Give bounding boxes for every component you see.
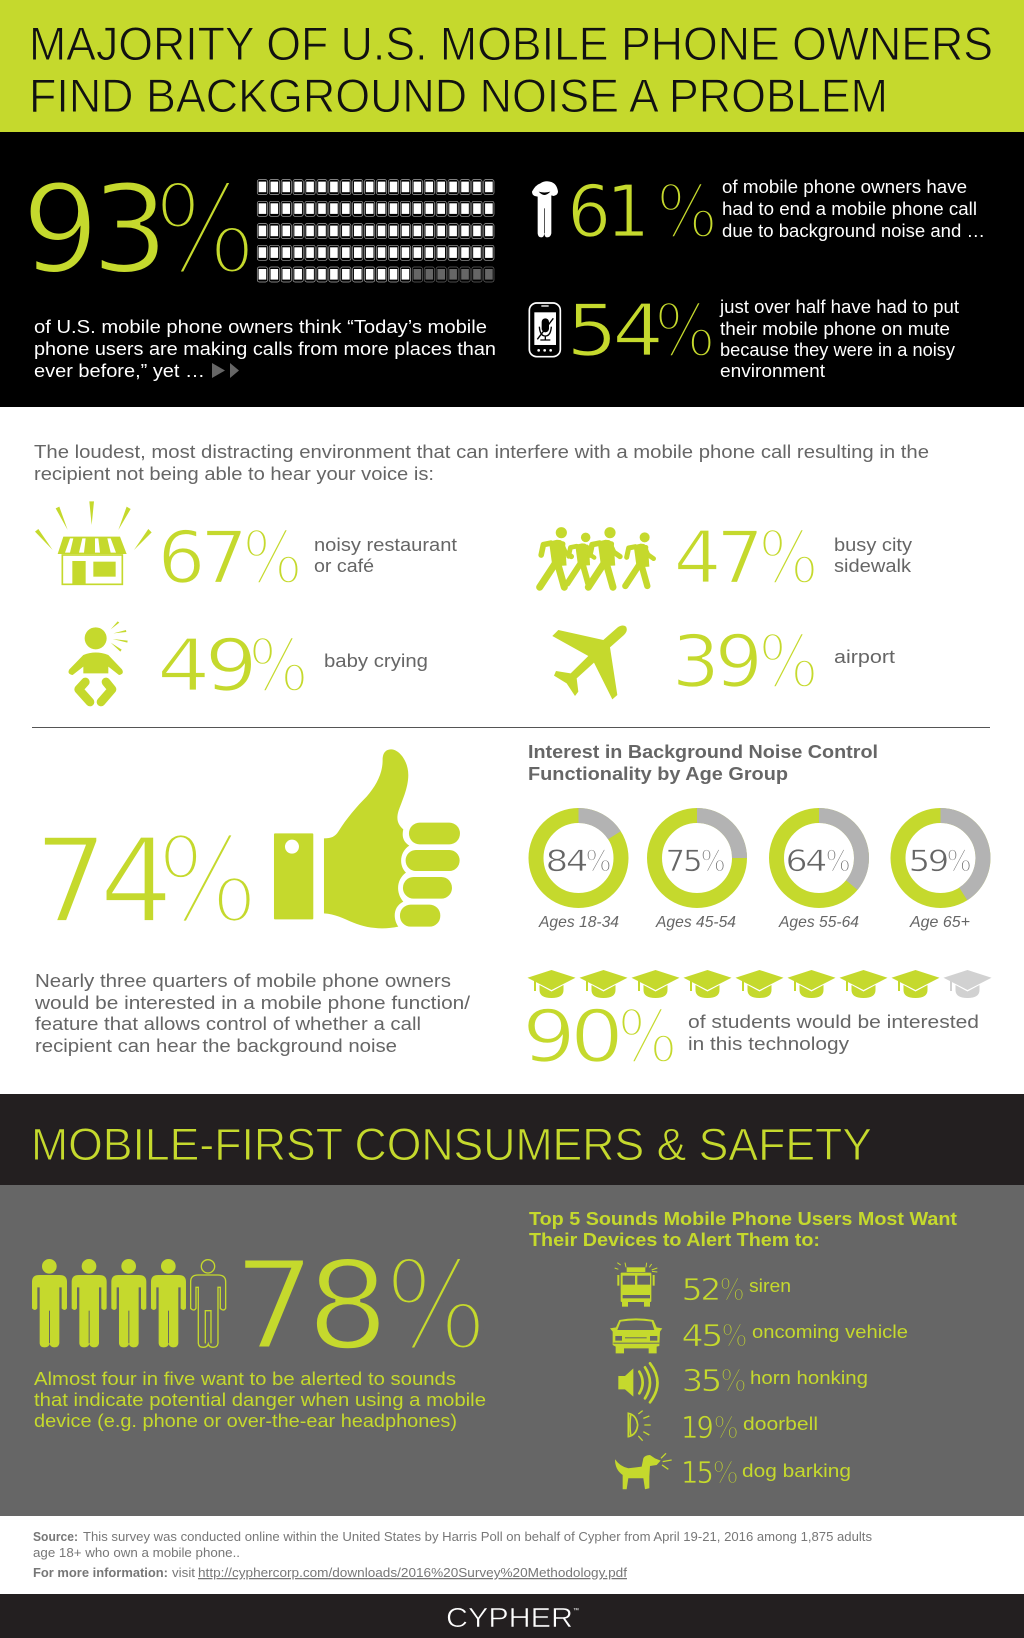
label: horn honking [750,1367,868,1388]
donut chart: ages 45-54: % [701,844,726,878]
donut chart: age 65+: Age 65+ [909,914,970,931]
text: 54 percent description [719,296,959,381]
footer: source notes: This survey was conducted online within the United States by Harris Poll on behalf of Cypher from April 19-21, 2016 among 1,875 adults [83,1530,872,1544]
stat: 67 percent noisy restaurant: 67 [158,516,243,600]
label: siren [749,1275,791,1296]
stat: 39 percent airport: 39 [672,620,758,704]
logo: Cypher: ™ [573,1607,579,1614]
donut chart: age 65+: % [947,844,972,878]
stat: 90 percent of students [522,994,979,1080]
stat: 78 percent: 78 [233,1235,381,1377]
panel: interest by age group [528,741,983,931]
text: 74 percent description [34,970,471,1056]
stat: 52 percent siren [682,1273,791,1308]
icon: barking dog [615,1453,672,1489]
text: 74 percent description: recipient can hear the background noise [35,1035,397,1056]
stat: 74 percent: % [157,812,258,951]
label [314,534,457,576]
text: 61 percent description: of mobile phone owners have [722,176,967,197]
donut chart: ages 55-64: Ages 55-64 [778,914,859,931]
stat: 78 percent: % [385,1234,487,1378]
icon row: people 4 of 5 [32,1259,226,1347]
text: 74 percent description: feature that allows control of whether a call [35,1013,421,1034]
text: 78 percent description: that indicate potential danger when using a mobile [34,1389,486,1410]
stat: 52 percent siren: 52 [682,1273,719,1308]
footer: source notes: age 18+ who own a mobile phone.. [33,1546,240,1560]
stat: 93 percent: % [154,158,256,302]
intro text: recipient not being able to hear your voice is: [34,463,434,484]
stat: 67 percent noisy restaurant: % [242,516,302,601]
icon: baby crying [69,621,128,702]
stat: 93 percent: 93 [21,159,160,301]
stat: 45 percent oncoming vehicle [682,1319,908,1354]
panel: 74 percent thumbs up [34,749,471,1056]
heading: Interest in Background Noise Control [528,741,878,762]
icon: doorbell [628,1411,651,1441]
text: 54 percent description: because they were in a noisy [720,339,956,360]
icon grid: 100 phones, 93 highlighted [257,180,494,282]
footer band with logo [0,1594,1024,1638]
intro text: The loudest, most distracting environment that can interfere with a mobile phone call resulting in the [34,441,929,462]
stat: 15 percent dog barking: % [713,1456,739,1491]
stat: 19 percent doorbell: 19 [681,1411,712,1446]
label: doorbell [743,1413,818,1434]
label: oncoming vehicle [752,1321,908,1342]
stat: 35 percent horn honking: 35 [682,1364,720,1399]
title: MAJORITY OF U.S. MOBILE PHONE OWNERS [29,17,993,70]
footer: source notes: For more information: [33,1566,168,1580]
heading: top 5 sounds [529,1208,957,1250]
text: 93 percent description: of U.S. mobile phone owners think “Today’s mobile [34,316,487,337]
stat: 49 percent baby crying [157,624,428,709]
stat: 15 percent dog barking [681,1456,851,1491]
text: 74 percent description: Nearly three quarters of mobile phone owners [35,970,451,991]
text: 74 percent description: would be interested in a mobile phone function/ [34,992,471,1013]
stat: 49 percent baby crying: % [248,624,308,709]
stat: 61 percent [567,170,718,255]
donut chart: age 65+ [898,816,983,931]
text: 61 percent description: due to background noise and … [722,220,985,241]
icon: airplane [552,625,627,699]
stat: 47 percent busy sidewalk: 47 [674,516,759,600]
stat: 39 percent airport [672,620,895,705]
icon: walking people [540,527,654,587]
stat: 54 percent: 54 [566,288,660,372]
stat: 61 percent: 61 [567,170,645,254]
footer: source notes [33,1530,872,1580]
donut chart: ages 18-34: % [586,844,612,878]
text: 93 percent description: phone users are making calls from more places than [34,338,496,359]
stat: 19 percent doorbell [681,1411,818,1446]
stat: 90 percent of students: % [618,995,678,1080]
donut chart: ages 45-54 [654,816,740,931]
label: airport [834,646,895,667]
text: 54 percent description: environment [720,360,825,381]
icon: noisy storefront [35,501,152,585]
donut chart: ages 18-34: 84 [546,844,588,878]
panel: loudest environments [0,407,1024,730]
stat: 47 percent busy sidewalk: % [758,516,818,601]
title [29,17,993,122]
donut chart: age 65+: 59 [909,844,947,878]
text: students description: in this technology [688,1033,850,1054]
label: sidewalk [834,555,912,576]
text: 54 percent description: just over half have had to put [719,296,959,317]
stat: 90 percent of students: 90 [522,994,619,1078]
text: 93 percent description [34,316,496,381]
stat: 54 percent [566,288,716,374]
label: busy city [834,534,913,555]
donut chart: ages 45-54: 75 [666,844,701,878]
icon: thumbs up [274,749,460,928]
heading: top 5 sounds: Top 5 Sounds Mobile Phone Users Most Want [529,1208,957,1229]
donut chart: ages 18-34 [536,816,621,931]
panel: black statistics [0,132,1024,407]
footer: source notes: http://cyphercorp.com/downloads/2016%20Survey%20Methodology.pdf [198,1566,628,1580]
label: noisy restaurant [314,534,457,555]
icon: speaker [618,1363,657,1402]
arrows [212,363,239,378]
icon row: graduation caps [528,970,992,998]
text: 61 percent description [722,176,985,241]
stat: 49 percent baby crying: 49 [157,624,252,708]
heading: top 5 sounds: Their Devices to Alert Them to: [529,1229,820,1250]
label [834,534,913,576]
footer: source notes: visit [172,1566,196,1580]
label: or café [314,555,374,576]
title: FIND BACKGROUND NOISE A PROBLEM [29,69,888,122]
icon: car [610,1318,662,1353]
donut chart: ages 55-64: 64 [786,844,827,878]
text: 54 percent description: their mobile phone on mute [720,318,950,339]
stat: 15 percent dog barking: 15 [681,1456,712,1491]
panel: safety [0,1185,1024,1516]
stat: 78 percent [233,1234,487,1378]
stat: 39 percent airport: % [758,620,818,705]
section heading band [0,1094,1024,1185]
stat: 74 percent [34,812,258,951]
text: 78 percent description: device (e.g. phone or over-the-ear headphones) [34,1410,457,1431]
heading [528,741,878,784]
icon: person covering ear [532,181,558,237]
stat: 93 percent [21,158,256,302]
stat: 61 percent: % [656,170,718,255]
label: baby crying [324,650,428,671]
icon: phone on mute [529,303,560,357]
stat: 45 percent oncoming vehicle: 45 [682,1319,721,1354]
header banner [0,0,1024,132]
icon: fire truck [615,1263,657,1307]
stat: 52 percent siren: % [720,1273,745,1308]
footer: source notes: Source: [33,1530,78,1544]
text: 78 percent description: Almost four in five want to be alerted to sounds [34,1368,456,1389]
stat: 35 percent horn honking: % [720,1364,746,1399]
donut chart: ages 45-54: Ages 45-54 [655,914,736,931]
text: 61 percent description: had to end a mobile phone call [722,198,977,219]
stat: 45 percent oncoming vehicle: % [722,1319,748,1354]
stat: 74 percent: 74 [34,812,167,950]
stat: 35 percent horn honking [682,1364,868,1399]
heading: Functionality by Age Group [528,763,788,784]
donut chart: ages 55-64 [776,816,862,931]
text: 78 percent description [34,1368,486,1431]
text: 93 percent description: ever before,” yet … [34,360,205,381]
label: dog barking [742,1460,851,1481]
stat: 54 percent: % [654,289,716,374]
text: students description [688,1011,979,1054]
stat: 47 percent busy sidewalk [674,516,913,601]
stat: 67 percent noisy restaurant [158,516,457,601]
section title: MOBILE-FIRST CONSUMERS & SAFETY [31,1119,872,1170]
text: students description: of students would be interested [688,1011,979,1032]
logo: Cypher: CYPHER [446,1602,573,1633]
stat: 19 percent doorbell: % [714,1411,739,1446]
intro text [34,441,929,484]
donut chart: ages 18-34: Ages 18-34 [538,914,619,931]
donut chart: ages 55-64: % [826,844,851,878]
